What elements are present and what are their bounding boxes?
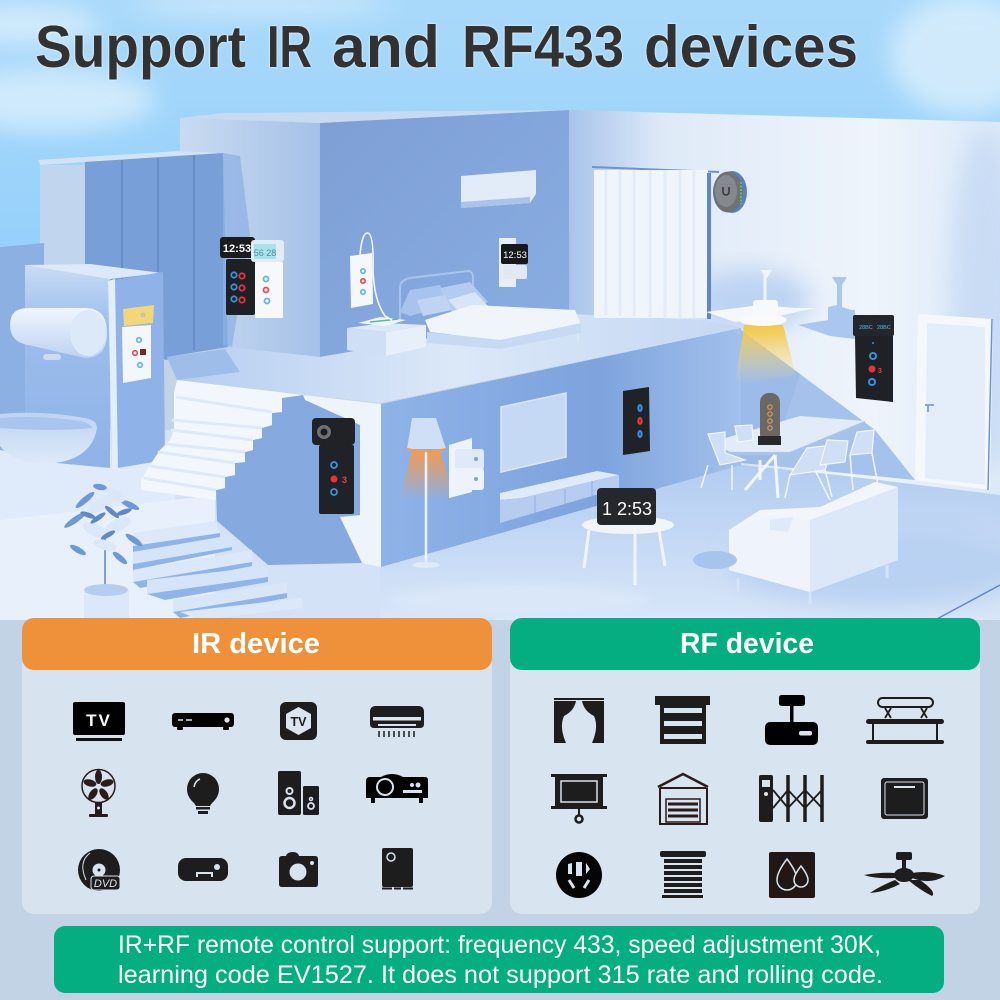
main bedroom blue wall [320,110,569,357]
callout: remote control support note: learning code EV1527. It does not support 315 rate and rolling code. [118,961,883,989]
bathtub [0,413,97,463]
wall outlet plugs [449,438,484,498]
device: black panel on right wall: 3 [878,368,882,375]
device: black panel on right wall: 28BC [877,325,891,331]
icon: projector [366,774,428,803]
RF header bar: RF device [680,628,814,660]
icon: wall switch [881,778,928,819]
device: black and white wall panels with displays [220,237,284,318]
device: black and white wall panels with displays: 56 28 [254,248,276,258]
device: white panel with cable [350,233,392,320]
illustrated smart-home cross-section scene [0,110,1000,620]
device: plug with black clock [499,238,528,287]
bed [400,271,581,356]
icon: DVD disc [78,849,120,891]
icon: air conditioner [370,706,424,737]
icon: curtains [554,698,604,743]
title: and [332,14,440,80]
RF header bar [510,618,980,670]
sofa [693,482,898,604]
icon: DVD disc: DVD [94,878,117,890]
icon: set-top box [172,713,234,730]
bathroom back wall and partition [0,243,165,469]
IR header bar: IR device [192,628,320,660]
icon: roller shutter [655,696,710,744]
icon: ceiling projector [765,695,818,745]
central upper block side wall [180,118,320,357]
IR header bar [22,618,492,670]
upper floor slab [167,314,741,403]
icon: projection screen [551,774,607,822]
icon: light bulb [187,773,219,814]
ceiling fan shadow [798,277,855,339]
curtain and rod [592,167,719,319]
lower blue wall [381,328,741,567]
nightstand with tray [347,317,426,356]
icon: TV hexagon [280,702,317,740]
device: black and white wall panels with displays: 12:53 [223,243,251,255]
icon: camera [279,852,318,887]
title: RF433 [462,14,624,80]
panel: IR device [22,618,492,914]
icon: streaming device [178,858,228,881]
left back wardrobe block [38,151,228,360]
icon: water drops [769,852,815,898]
icon: socket [556,852,602,898]
wall shadow wedge [741,330,915,480]
upper staircase [141,380,303,500]
wall air conditioner [461,170,536,208]
icon: TV hexagon: TV [291,715,307,729]
device: remote on stand [758,393,781,445]
tv bench [500,471,619,523]
coffee table with clock: 1 2:53 [602,499,652,519]
wall painting [501,393,566,472]
device: tall black panel [623,387,650,455]
dining table and chairs [701,416,878,500]
icon: ceiling fan [864,852,945,896]
grey round hub device [713,171,747,213]
device: black panel on right wall [853,315,894,402]
ground floor [0,430,1000,620]
coffee table with clock [582,488,674,585]
icon: TV: TV [86,711,112,730]
icon: lift platform [866,698,944,744]
icon: desk fan [82,770,115,817]
icon: garage [658,774,708,824]
door [915,314,993,490]
icon: venetian blind [660,851,706,898]
water heater cylinder [10,308,107,360]
device: plug with black clock: 12:53 [503,250,527,261]
icon: tower box [382,848,413,888]
potted plant [63,483,144,620]
icon: speakers [278,771,319,815]
icon: TV [73,702,125,741]
callout: remote control support note: IR+RF remote control support: frequency 433, speed adjustment 30K, [118,931,881,959]
white stair block face and shaded wall [216,395,381,567]
title: devices [644,14,858,80]
floor lamp [400,418,455,568]
device: camera module black panel: 3 [342,475,347,485]
device: camera module black panel [312,418,355,514]
panel: RF device [510,618,980,914]
lower staircase [133,521,302,620]
device: black panel on right wall: 28BC [859,325,873,331]
icon: folding gate [759,775,822,822]
title: IR [267,14,312,80]
callout: remote control support note [54,926,944,993]
white right wall [569,110,1000,495]
device: yellow top panel on heater wall [122,305,154,383]
title [35,14,858,80]
title: Support [35,14,246,80]
ceiling fan with light [706,270,815,385]
